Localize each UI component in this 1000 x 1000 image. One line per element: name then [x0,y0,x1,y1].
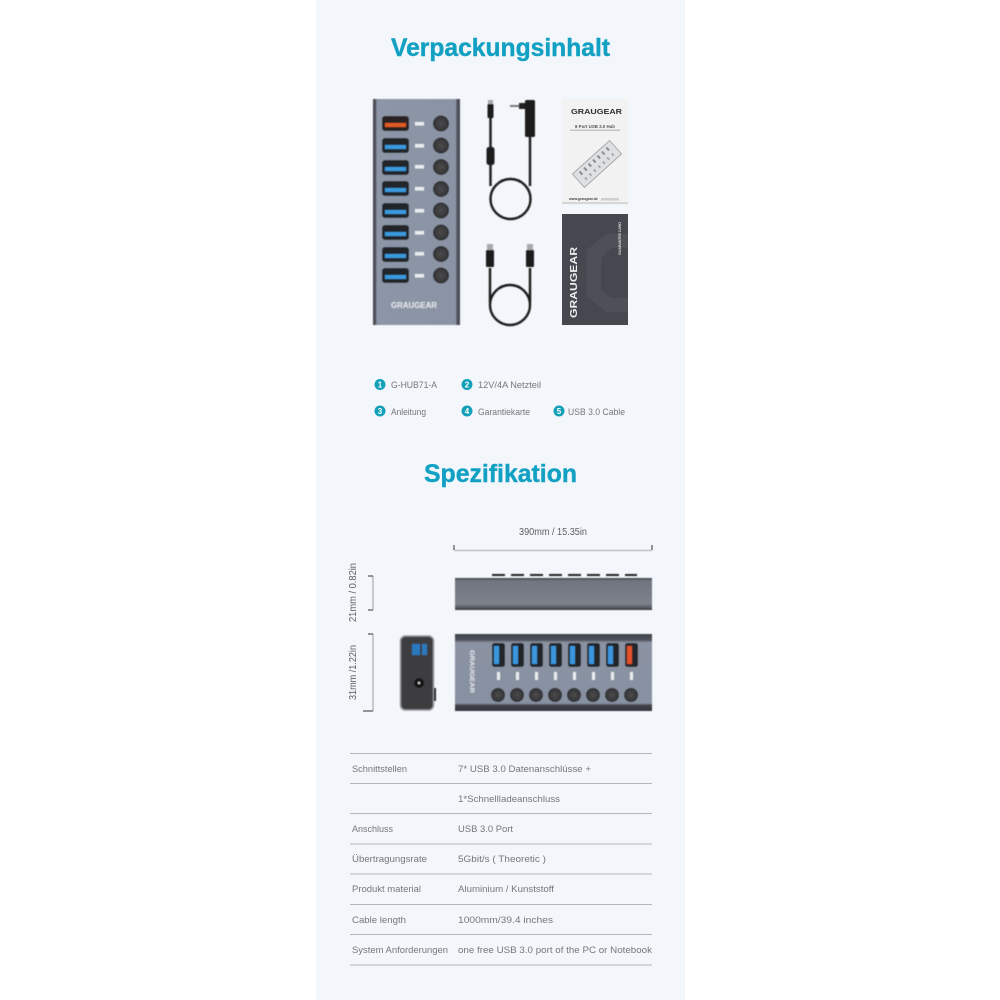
USB 3.0 cable [486,244,534,325]
legend item 3: 3 [378,407,383,416]
row: Übertragungsrate: Übertragungsrate [352,854,427,865]
row: Anschluss: USB 3.0 Port [458,824,513,835]
dimension: height 21mm: 21mm / 0.82in [348,563,359,622]
row: System Anforderungen: one free USB 3.0 port of the PC or Notebook [458,945,652,956]
top view buttons [491,688,638,702]
row: Übertragungsrate: 5Gbit/s ( Theoretic ) [458,854,546,865]
dimension: height 21mm [348,563,373,622]
manual logo: GRAUGEAR [571,107,623,116]
legend item 5: 5 [557,407,562,416]
row: Produkt material: Aluminium / Kunststoff [458,884,554,895]
row: Anschluss [352,824,513,835]
top view LEDs [497,672,633,680]
row: Schnittstellen: Schnittstellen [352,764,407,775]
row: Cable length [352,915,553,926]
port 6 [382,225,409,240]
background panel [316,0,685,1000]
port 8 [382,268,409,283]
row: System Anforderungen [352,945,652,956]
legend item 4 [462,406,530,418]
port 5 [382,203,409,218]
power adapter with cable [486,100,535,219]
legend item 4: 4 [465,407,470,416]
end view power jack [414,678,424,688]
top view port inserts [494,646,632,664]
product: USB hub front view [373,99,460,325]
row: Schnittstellen [352,764,591,775]
manual footer: www.graugear.de [568,197,598,201]
row: Produkt material: Produkt material [352,884,421,895]
port 2 [382,138,409,153]
top view logo: GRAUGEAR [468,650,475,693]
legend item 1: 1 [378,380,383,390]
legend item 5: USB 3.0 Cable [568,407,625,418]
manual title: 8 Port USB 3.0 Hub [575,124,615,129]
hub end view [400,636,436,710]
dimension: depth 31mm [348,634,373,711]
row: Cable length: 1000mm/39.4 inches [458,915,553,926]
legend item 1 [374,379,438,391]
legend item 4: Garantiekarte [478,407,530,418]
card logo: GRAUGEAR [569,246,580,318]
row: Schnellladeanschluss: 1*Schnellladeanschluss [458,794,560,805]
end view switch [434,688,436,701]
top view ports [492,643,638,667]
hub side view [455,575,652,610]
legend item 1: G-HUB71-A [391,380,438,391]
dimension: length [454,527,652,550]
legend item 3 [374,406,426,418]
manual booklet [562,99,628,205]
legend item 2: 2 [465,380,470,390]
card watermark G [587,234,628,312]
status LEDs [415,122,424,278]
hub top view [455,634,652,711]
row: System Anforderungen: System Anforderungen [352,945,448,956]
card label: GUARANTEE CARD [618,222,622,255]
heading: Verpackungsinhalt: Verpackungsinhalt [391,34,611,62]
port 1: orange [382,116,409,131]
heading: Spezifikation: Spezifikation [424,460,577,488]
row: Cable length: Cable length [352,915,406,926]
legend item 3: Anleitung [391,407,426,418]
legend item 2: 12V/4A Netzteil [478,380,541,391]
row: Produkt material [352,884,554,895]
power buttons [433,116,449,284]
dimension: depth 31mm: 31mm /1.22in [348,645,359,700]
row: Übertragungsrate [352,854,546,865]
end view USB ports [412,644,427,655]
manual hub illustration [572,141,622,187]
port 3 [382,160,409,175]
port 4 [382,181,409,196]
port 7 [382,247,409,262]
guarantee card [562,214,628,325]
dimension: length: 390mm / 15.35in [519,527,587,538]
legend [374,379,625,418]
side view buttons [492,574,637,576]
specification table [350,754,652,965]
hub logo: GRAUGEAR [391,301,437,310]
legend item 5 [554,406,625,418]
row: Schnittstellen: 7* USB 3.0 Datenanschlüsse + [458,764,591,775]
row: Anschluss: Anschluss [352,824,393,835]
